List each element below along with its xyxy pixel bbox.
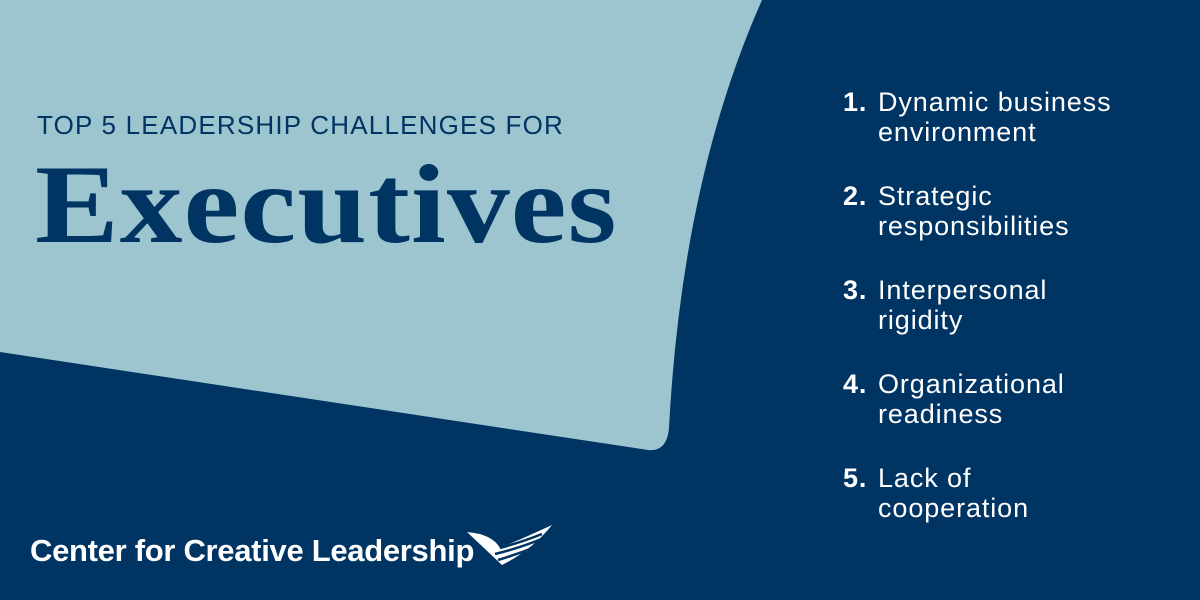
- item 5: Lack of: [878, 463, 971, 493]
- item 2: 2.: [843, 181, 867, 211]
- logo text: Center for Creative Leadership: [30, 533, 474, 568]
- subtitle: TOP 5 LEADERSHIP CHALLENGES FOR: [37, 110, 564, 140]
- item 2: responsibilities: [878, 211, 1069, 241]
- item 4: readiness: [878, 399, 1003, 429]
- item 5: [843, 463, 1029, 523]
- item 5: cooperation: [878, 493, 1029, 523]
- item 4: 4.: [843, 369, 867, 399]
- item 1: Dynamic business: [878, 87, 1112, 117]
- item 4: [843, 369, 1065, 429]
- item 3: Interpersonal: [878, 275, 1047, 305]
- item 3: [843, 275, 1047, 335]
- item 1: [843, 87, 1112, 147]
- item 4: Organizational: [878, 369, 1065, 399]
- item 3: rigidity: [878, 305, 963, 335]
- item 1: 1.: [843, 87, 867, 117]
- list of challenges: [843, 87, 1112, 523]
- item 5: 5.: [843, 463, 867, 493]
- icon: logo swoosh: [467, 525, 552, 565]
- title: Executives: [35, 143, 618, 267]
- item 1: environment: [878, 117, 1036, 147]
- item 2: [843, 181, 1069, 241]
- item 2: Strategic: [878, 181, 993, 211]
- item 3: 3.: [843, 275, 867, 305]
